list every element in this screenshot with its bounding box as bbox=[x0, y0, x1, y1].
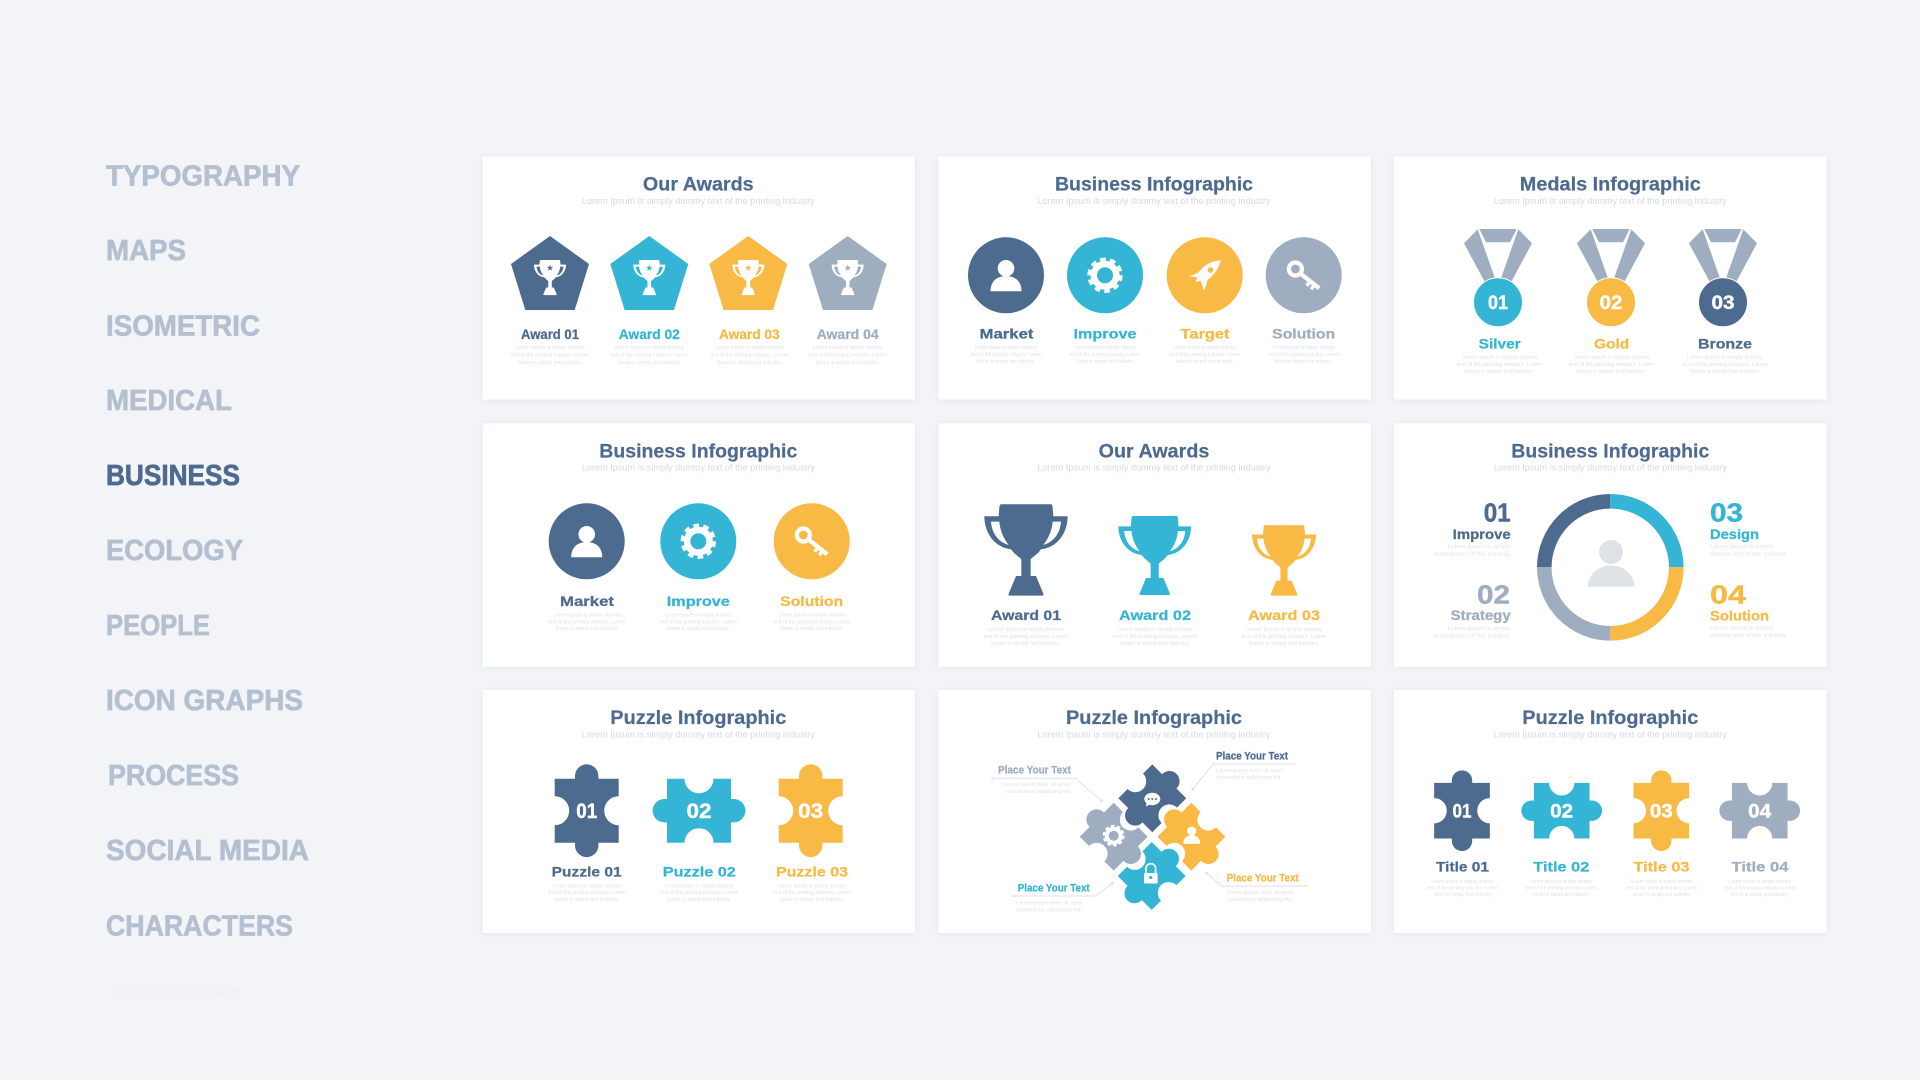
improve: text of the printing industry. Lorem bbox=[660, 619, 737, 625]
icon: person bbox=[1588, 540, 1634, 587]
award 02 trophy: Award 02 bbox=[1119, 607, 1191, 623]
award 03 trophy: Lorem Ipsum is simply dummy bbox=[1246, 627, 1322, 633]
title 02: 02 bbox=[1550, 802, 1573, 822]
market: Lorem Ipsum is simply dummy bbox=[554, 612, 621, 618]
medal bronze: Ipsum is simply text industry. bbox=[1690, 369, 1760, 375]
solution: Lorem Ipsum is simply dummy bbox=[1273, 345, 1335, 351]
medal silver: Silver bbox=[1479, 335, 1521, 351]
market: Ipsum is simply text industry. bbox=[556, 626, 618, 632]
medal gold: Ipsum is simply text industry. bbox=[1577, 369, 1647, 375]
callout: yellow: Place Your Text bbox=[1227, 873, 1299, 885]
item 01 improve bbox=[1434, 498, 1511, 558]
award 01 trophy: Award 01 bbox=[991, 607, 1061, 623]
target bbox=[1167, 237, 1243, 365]
award 01 trophy: Ipsum is simply text industry. bbox=[991, 641, 1061, 647]
title 04: Title 04 bbox=[1732, 858, 1789, 874]
item 02 strategy bbox=[1434, 580, 1511, 639]
subheading: Lorem Ipsum is simply dummy text of the printing industry bbox=[1494, 196, 1727, 206]
nav: people: PEOPLE bbox=[106, 610, 210, 642]
award 01 trophy: Lorem Ipsum is simply dummy bbox=[988, 627, 1064, 633]
solution bbox=[1266, 237, 1342, 365]
medal silver: Lorem Ipsum is simply dummy bbox=[1462, 355, 1538, 361]
target: Lorem Ipsum is simply dummy bbox=[1174, 345, 1236, 351]
title 03: Title 03 bbox=[1634, 858, 1690, 874]
award 04: Ipsum is simply text industry. bbox=[816, 360, 880, 366]
award 02: text of the printing industry. Lorem bbox=[610, 352, 688, 358]
puzzle 03 bbox=[773, 764, 851, 903]
panel: business infographic four circles bbox=[938, 156, 1371, 400]
puzzle piece: cyan lock bbox=[1110, 835, 1193, 917]
card bbox=[1394, 423, 1827, 667]
panel: puzzle infographic three pieces bbox=[483, 690, 915, 933]
improve: Lorem Ipsum is simply dummy bbox=[665, 612, 732, 618]
subheading: Lorem Ipsum is simply dummy text of the printing industry bbox=[582, 463, 815, 473]
market: text of the printing industry. Lorem bbox=[970, 352, 1042, 358]
award 02: Award 02 bbox=[619, 326, 680, 342]
heading: Our Awards bbox=[1099, 441, 1209, 462]
puzzle 01: Lorem Ipsum is simply dummy bbox=[552, 883, 622, 889]
item 02 strategy: Lorem Ipsum is simply bbox=[1448, 626, 1511, 632]
award 03: text of the printing industry. Lorem bbox=[710, 352, 788, 358]
puzzle 03: Lorem Ipsum is simply dummy bbox=[778, 883, 847, 889]
puzzle 01: text of the printing industry. Lorem bbox=[548, 890, 626, 896]
award 03 trophy bbox=[1242, 525, 1326, 647]
award 03: Lorem Ipsum is simply dummy bbox=[714, 345, 785, 351]
award 04 bbox=[809, 236, 887, 366]
medal gold: Gold bbox=[1594, 335, 1629, 351]
callout: grey bbox=[991, 764, 1103, 802]
card bbox=[483, 690, 915, 933]
title 01: 01 bbox=[1452, 802, 1472, 822]
title 01: Ipsum is simply text industry. bbox=[1434, 892, 1492, 898]
award 03 bbox=[709, 236, 788, 366]
callout: grey: Place Your Text bbox=[998, 764, 1071, 776]
medal bronze: text of the printing industry. Lorem bbox=[1682, 362, 1768, 368]
award 04: Lorem Ipsum is simply dummy bbox=[813, 345, 883, 351]
award 01: Award 01 bbox=[521, 326, 579, 342]
item 04 solution bbox=[1710, 580, 1787, 639]
subheading: Lorem Ipsum is simply dummy text of the printing industry bbox=[1494, 730, 1727, 740]
puzzle 01: Puzzle 01 bbox=[552, 864, 622, 880]
target: text of the printing industry. Lorem bbox=[1169, 352, 1240, 358]
award 01 bbox=[511, 236, 589, 366]
nav: process: PROCESS bbox=[108, 760, 239, 792]
puzzle 03: Ipsum is simply text industry. bbox=[780, 897, 844, 903]
title 04: Ipsum is simply text industry. bbox=[1731, 892, 1789, 898]
card bbox=[938, 690, 1371, 933]
card bbox=[483, 156, 915, 400]
title 02: text of the printing industry. Lorem bbox=[1526, 886, 1597, 892]
improve: Improve bbox=[1074, 326, 1137, 342]
market: Market bbox=[980, 326, 1034, 342]
improve bbox=[660, 503, 737, 632]
solution bbox=[773, 503, 850, 632]
card bbox=[1394, 690, 1827, 933]
award 03 trophy: Award 03 bbox=[1248, 607, 1320, 623]
award 03 trophy: text of the printing industry. Lorem bbox=[1242, 634, 1326, 640]
card bbox=[938, 156, 1371, 400]
heading: Puzzle Infographic bbox=[1522, 708, 1699, 729]
medal bronze: Lorem Ipsum is simply dummy bbox=[1687, 355, 1763, 361]
sidebar navigation bbox=[106, 160, 309, 1000]
item 01 improve: dummy text of the printing. bbox=[1434, 552, 1511, 558]
solution: text of the printing industry. Lorem bbox=[1268, 352, 1339, 358]
callout: yellow: Lorem ipsum dolor sit amet, bbox=[1227, 890, 1295, 896]
award 01: Ipsum is simply text industry. bbox=[518, 360, 582, 366]
market: Lorem Ipsum is simply dummy bbox=[975, 345, 1037, 351]
subheading: Lorem Ipsum is simply dummy text of the printing industry bbox=[1038, 196, 1271, 206]
card bbox=[483, 423, 915, 667]
item 04 solution: dummy text of the printing. bbox=[1710, 633, 1787, 639]
medal bronze bbox=[1682, 229, 1768, 375]
callout: navy: Place Your Text bbox=[1216, 750, 1288, 762]
award 03: Award 03 bbox=[719, 326, 780, 342]
medal gold: Lorem Ipsum is simply dummy bbox=[1574, 355, 1650, 361]
medal silver bbox=[1457, 229, 1543, 375]
item 04 solution: 04 bbox=[1710, 580, 1747, 610]
award 01: text of the printing industry. Lorem bbox=[511, 352, 589, 358]
item 02 strategy: Strategy bbox=[1451, 608, 1511, 623]
panel: medals infographic bbox=[1394, 156, 1827, 400]
puzzle 03: text of the printing industry. Lorem bbox=[773, 890, 851, 896]
title 03 bbox=[1626, 770, 1697, 898]
panel: business infographic three circles bbox=[483, 423, 915, 667]
callout: cyan: Lorem ipsum dolor sit amet, bbox=[1016, 901, 1084, 907]
callout: cyan: consectetur adipiscing elit. bbox=[1016, 907, 1082, 913]
callout: yellow bbox=[1205, 872, 1307, 903]
market bbox=[548, 503, 626, 632]
nav: typography: TYPOGRAPHY bbox=[106, 160, 300, 192]
title 02: Ipsum is simply text industry. bbox=[1532, 892, 1590, 898]
award 02 bbox=[610, 236, 688, 366]
puzzle 02: Puzzle 02 bbox=[663, 864, 736, 880]
subheading: Lorem Ipsum is simply dummy text of the printing industry bbox=[582, 196, 815, 206]
award 02 trophy: Ipsum is simply text industry. bbox=[1120, 641, 1190, 647]
title 01: Lorem Ipsum is simply dummy bbox=[1432, 879, 1494, 885]
solution: text of the printing industry. Lorem bbox=[773, 619, 850, 625]
solution: Solution bbox=[780, 593, 843, 609]
award 01 trophy: text of the printing industry. Lorem bbox=[984, 634, 1068, 640]
puzzle 02: Ipsum is simply text industry. bbox=[667, 897, 731, 903]
panel: our awards pentagons bbox=[483, 156, 915, 400]
nav: faded extra item: & MANY MORE bbox=[113, 985, 240, 1000]
medal silver: Ipsum is simply text industry. bbox=[1465, 369, 1535, 375]
callout: cyan: Place Your Text bbox=[1018, 883, 1090, 895]
item 03 design: Design bbox=[1710, 527, 1759, 542]
puzzle 01 bbox=[548, 764, 626, 903]
title 02 bbox=[1521, 783, 1602, 898]
improve: Improve bbox=[667, 593, 730, 609]
item 04 solution: Lorem Ipsum is simply bbox=[1710, 626, 1773, 632]
puzzle 01: Ipsum is simply text industry. bbox=[555, 897, 619, 903]
title 03: 03 bbox=[1650, 802, 1673, 822]
callout: grey: consectetur adipiscing elit. bbox=[1006, 789, 1072, 795]
callout: yellow: consectetur adipiscing elit. bbox=[1227, 897, 1293, 903]
puzzle 03: 03 bbox=[798, 800, 823, 823]
nav: ecology: ECOLOGY bbox=[106, 535, 243, 567]
award 02: Lorem Ipsum is simply dummy bbox=[614, 345, 685, 351]
heading: Business Infographic bbox=[599, 441, 798, 462]
nav: medical: MEDICAL bbox=[106, 385, 232, 417]
award 04: Award 04 bbox=[817, 326, 879, 342]
callout: navy: Lorem ipsum dolor sit amet, bbox=[1216, 768, 1284, 774]
solution: Ipsum is simply text industry. bbox=[780, 626, 843, 632]
market: text of the printing industry. Lorem bbox=[548, 619, 626, 625]
puzzle 01: 01 bbox=[576, 800, 597, 823]
award 03 trophy: Ipsum is simply text industry. bbox=[1249, 641, 1319, 647]
item 02 strategy: dummy text of the printing. bbox=[1434, 633, 1511, 639]
improve: Ipsum is simply text industry. bbox=[1076, 359, 1134, 365]
puzzle piece: yellow person bbox=[1150, 795, 1233, 878]
heading: Business Infographic bbox=[1055, 174, 1253, 196]
card bbox=[938, 423, 1371, 667]
target: Target bbox=[1180, 326, 1230, 342]
title 03: Ipsum is simply text industry. bbox=[1632, 892, 1690, 898]
title 01: text of the printing industry. Lorem bbox=[1427, 886, 1498, 892]
award 01: Lorem Ipsum is simply dummy bbox=[515, 345, 585, 351]
puzzle 03: Puzzle 03 bbox=[776, 864, 848, 880]
item 04 solution: Solution bbox=[1710, 608, 1769, 623]
medal gold: text of the printing industry. Lorem bbox=[1569, 362, 1655, 368]
callout: grey: Lorem ipsum dolor sit amet, bbox=[1003, 782, 1072, 788]
title 04: Lorem Ipsum is simply dummy bbox=[1729, 879, 1791, 885]
panel: business infographic ring bbox=[1394, 423, 1827, 667]
title 02: Lorem Ipsum is simply dummy bbox=[1530, 879, 1593, 885]
item 01 improve: Improve bbox=[1453, 527, 1511, 542]
title 01: Title 01 bbox=[1436, 858, 1489, 874]
award 02 trophy: Lorem Ipsum is simply dummy bbox=[1117, 627, 1193, 633]
solution: Ipsum is simply text industry. bbox=[1275, 359, 1333, 365]
heading: Business Infographic bbox=[1511, 441, 1710, 462]
improve: text of the printing industry. Lorem bbox=[1070, 352, 1140, 358]
heading: Puzzle Infographic bbox=[610, 708, 787, 729]
improve bbox=[1067, 237, 1143, 365]
award 02: Ipsum is simply text industry. bbox=[617, 360, 681, 366]
item 03 design: dummy text of the printing. bbox=[1710, 552, 1787, 558]
medal gold: 02 bbox=[1600, 293, 1622, 314]
medal silver: text of the printing industry. Lorem bbox=[1457, 362, 1543, 368]
title 04: text of the printing industry. Lorem bbox=[1724, 886, 1796, 892]
title 04: 04 bbox=[1748, 802, 1772, 822]
item 03 design bbox=[1710, 498, 1787, 558]
puzzle 02: 02 bbox=[686, 800, 712, 823]
item 01 improve: 01 bbox=[1484, 498, 1511, 528]
nav: isometric: ISOMETRIC bbox=[106, 310, 260, 342]
panel: puzzle infographic four pieces bbox=[1394, 690, 1827, 933]
market bbox=[968, 237, 1044, 365]
nav: maps: MAPS bbox=[106, 235, 186, 267]
puzzle 02: text of the printing industry. Lorem bbox=[660, 890, 738, 896]
panel: our awards trophies bbox=[938, 423, 1371, 667]
donut ring bbox=[1544, 501, 1676, 633]
subheading: Lorem Ipsum is simply dummy text of the printing industry bbox=[1038, 730, 1271, 740]
card bbox=[1394, 156, 1827, 400]
item 02 strategy: 02 bbox=[1477, 580, 1510, 610]
award 04: text of the printing industry. Lorem bbox=[809, 352, 887, 358]
panel: puzzle infographic diamond bbox=[938, 690, 1371, 933]
award 02 trophy bbox=[1112, 516, 1198, 647]
heading: Puzzle Infographic bbox=[1066, 708, 1242, 729]
item 03 design: 03 bbox=[1710, 498, 1743, 528]
award 01 trophy bbox=[984, 504, 1068, 647]
title 01 bbox=[1427, 770, 1498, 898]
medal silver: 01 bbox=[1488, 293, 1508, 314]
medal gold bbox=[1569, 229, 1655, 375]
market: Ipsum is simply text industry. bbox=[977, 359, 1035, 365]
medal bronze: 03 bbox=[1712, 293, 1734, 314]
title 04 bbox=[1719, 783, 1800, 898]
title 02: Title 02 bbox=[1533, 858, 1590, 874]
puzzle 02 bbox=[653, 779, 745, 903]
improve: Ipsum is simply text industry. bbox=[667, 626, 730, 632]
medal bronze: Bronze bbox=[1698, 335, 1752, 351]
callout: navy bbox=[1191, 750, 1297, 790]
title 03: text of the printing industry. Lorem bbox=[1626, 886, 1697, 892]
subheading: Lorem Ipsum is simply dummy text of the printing industry bbox=[1038, 463, 1271, 473]
award 02 trophy: text of the printing industry. Lorem bbox=[1112, 634, 1198, 640]
heading: Medals Infographic bbox=[1520, 174, 1701, 196]
nav: business active: BUSINESS bbox=[106, 460, 240, 492]
puzzle piece: navy chat bbox=[1111, 757, 1194, 840]
heading: Our Awards bbox=[643, 174, 754, 196]
subheading: Lorem Ipsum is simply dummy text of the printing industry bbox=[1494, 463, 1727, 473]
title 03: Lorem Ipsum is simply dummy bbox=[1630, 879, 1693, 885]
award 03: Ipsum is simply text industry. bbox=[717, 360, 781, 366]
nav: characters: CHARACTERS bbox=[106, 910, 293, 942]
puzzle piece: grey gear bbox=[1072, 795, 1155, 878]
target: Ipsum is simply text industry. bbox=[1176, 359, 1234, 365]
item 03 design: Lorem Ipsum is simply bbox=[1710, 544, 1773, 550]
improve: Lorem Ipsum is simply dummy bbox=[1074, 345, 1136, 351]
subheading: Lorem Ipsum is simply dummy text of the printing industry bbox=[582, 730, 815, 740]
nav: social media: SOCIAL MEDIA bbox=[106, 835, 309, 867]
market: Market bbox=[560, 593, 614, 609]
item 01 improve: Lorem Ipsum is simply bbox=[1448, 544, 1511, 550]
solution: Solution bbox=[1272, 326, 1335, 342]
callout: cyan bbox=[1012, 882, 1114, 913]
puzzle 02: Lorem Ipsum is simply dummy bbox=[665, 883, 734, 889]
nav: icon graphs: ICON GRAPHS bbox=[106, 685, 303, 717]
callout: navy: consectetur adipiscing elit. bbox=[1216, 775, 1282, 781]
solution: Lorem Ipsum is simply dummy bbox=[778, 612, 846, 618]
